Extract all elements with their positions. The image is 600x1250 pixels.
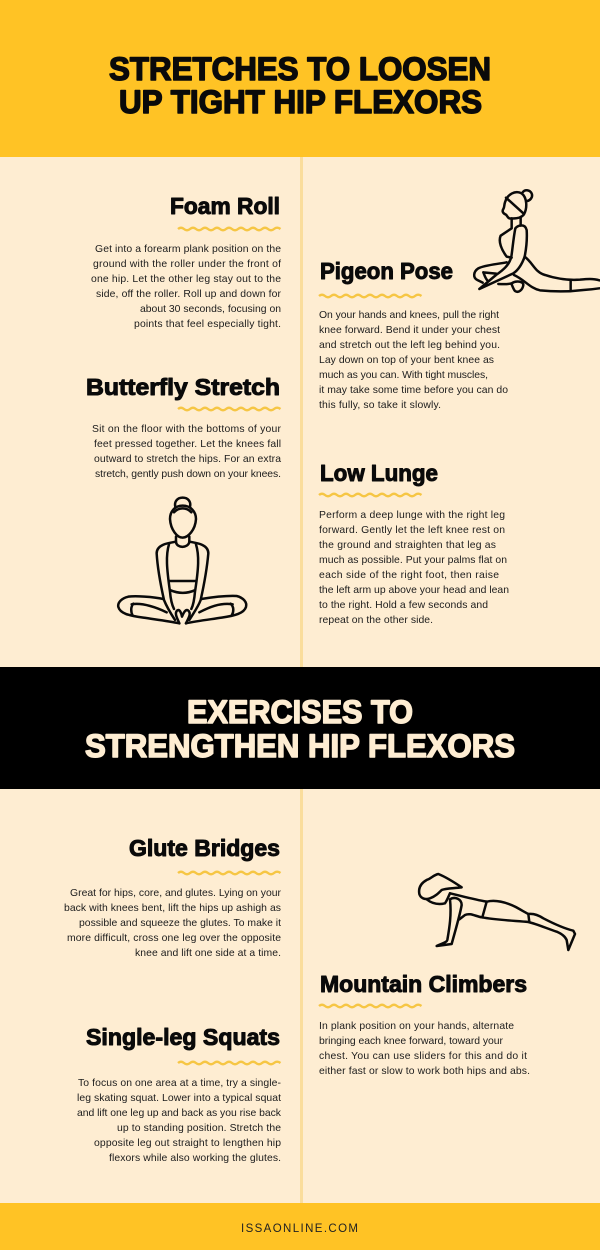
text: foam roll instructions: one hip. Let the other leg stay out to the bbox=[91, 274, 281, 285]
text: mountain climbers instructions: either fast or slow to work both hips and abs. bbox=[319, 1066, 530, 1077]
text: pigeon pose instructions: this fully, so take it slowly. bbox=[319, 400, 441, 411]
text: single-leg squats instructions: leg skating squat. Lower into a typical squat bbox=[77, 1093, 281, 1104]
heading: low lunge: Low Lunge bbox=[320, 460, 438, 486]
text: foam roll instructions: side, off the roller. Roll up and down for bbox=[96, 289, 282, 300]
text: foam roll instructions: ground with the roller under the front of bbox=[93, 259, 281, 270]
text: pigeon pose instructions: much as you can. With tight muscles, bbox=[319, 370, 488, 381]
text: mountain climbers instructions: bringing each knee forward, toward your bbox=[319, 1036, 504, 1047]
text: low lunge instructions: repeat on the other side. bbox=[319, 615, 433, 626]
text: glute bridges instructions: more difficult, cross one leg over the opposite bbox=[67, 933, 281, 944]
text: butterfly stretch instructions bbox=[92, 424, 282, 480]
text: low lunge instructions: much as possible. Put your palms flat on bbox=[319, 555, 507, 566]
text: foam roll instructions: Get into a forearm plank position on the bbox=[95, 244, 281, 255]
text: foam roll instructions bbox=[91, 244, 282, 330]
icon: plank figure bbox=[419, 874, 575, 950]
text: glute bridges instructions: possible and squeeze the glutes. To make it bbox=[79, 918, 281, 929]
text: glute bridges instructions: knee and lift one side at a time. bbox=[135, 948, 281, 959]
text: pigeon pose instructions: knee forward. Bend it under your chest bbox=[319, 325, 500, 336]
icon: pigeon pose figure bbox=[474, 190, 599, 292]
section heading bbox=[85, 694, 515, 764]
text: mountain climbers instructions bbox=[319, 1021, 530, 1077]
panel: single-leg squats bbox=[77, 1024, 282, 1164]
text: pigeon pose instructions: On your hands and knees, pull the right bbox=[319, 310, 499, 321]
text: foam roll instructions: about 30 seconds, focusing on bbox=[140, 304, 281, 315]
panel: foam roll bbox=[91, 193, 282, 330]
section heading: STRENGTHEN HIP FLEXORS bbox=[85, 728, 515, 764]
icon: butterfly pose figure bbox=[118, 498, 246, 623]
text: single-leg squats instructions: opposite leg out straight to lengthen hip bbox=[94, 1138, 281, 1149]
panel: pigeon pose bbox=[319, 258, 508, 411]
text: low lunge instructions: forward. Gently let the left knee rest on bbox=[319, 525, 505, 536]
text: glute bridges instructions: back with knees bent, lift the hips up ashigh as bbox=[64, 903, 281, 914]
text: foam roll instructions: points that feel especially tight. bbox=[134, 319, 281, 330]
text: low lunge instructions: to the right. Hold a few seconds and bbox=[319, 600, 488, 611]
footer url: ISSAONLINE.COM bbox=[241, 1223, 358, 1235]
text: low lunge instructions: each side of the right foot, then raise bbox=[319, 570, 499, 581]
title: UP TIGHT HIP FLEXORS bbox=[119, 84, 482, 120]
text: single-leg squats instructions bbox=[77, 1078, 282, 1164]
text: low lunge instructions: the left arm up above your head and lean bbox=[319, 585, 509, 596]
text: butterfly stretch instructions: outward to stretch the hips. For an extra bbox=[94, 454, 281, 465]
heading: foam roll: Foam Roll bbox=[170, 193, 280, 219]
panel: butterfly stretch bbox=[86, 374, 282, 480]
heading: mountain climbers: Mountain Climbers bbox=[320, 971, 527, 997]
title: STRETCHES TO LOOSEN bbox=[109, 51, 491, 87]
text: single-leg squats instructions: flexors while also working the glutes. bbox=[109, 1153, 281, 1164]
text: pigeon pose instructions: it may take some time before you can do bbox=[319, 385, 508, 396]
text: pigeon pose instructions: and stretch out the left leg behind you. bbox=[319, 340, 500, 351]
text: glute bridges instructions: Great for hips, core, and glutes. Lying on your bbox=[70, 888, 282, 899]
footer bbox=[0, 1203, 600, 1250]
text: pigeon pose instructions: Lay down on top of your bent knee as bbox=[319, 355, 494, 366]
text: low lunge instructions: the ground and straighten that leg as bbox=[319, 540, 496, 551]
text: single-leg squats instructions: and lift one leg up and back as you rise back bbox=[77, 1108, 282, 1119]
text: butterfly stretch instructions: stretch, gently push down on your knees. bbox=[95, 469, 281, 480]
heading: butterfly stretch: Butterfly Stretch bbox=[86, 374, 280, 400]
header band bbox=[0, 0, 600, 157]
panel: glute bridges bbox=[64, 835, 282, 959]
text: low lunge instructions: Perform a deep lunge with the right leg bbox=[319, 510, 505, 521]
text: butterfly stretch instructions: feet pressed together. Let the knees fall bbox=[94, 439, 281, 450]
heading: glute bridges: Glute Bridges bbox=[129, 835, 280, 861]
section heading: EXERCISES TO bbox=[187, 694, 413, 730]
text: glute bridges instructions bbox=[64, 888, 282, 959]
section band: strengthen bbox=[0, 667, 600, 789]
heading: single-leg squats: Single-leg Squats bbox=[86, 1024, 280, 1050]
text: mountain climbers instructions: chest. You can use sliders for this and do it bbox=[319, 1051, 527, 1062]
panel: low lunge bbox=[319, 460, 509, 626]
text: mountain climbers instructions: In plank position on your hands, alternate bbox=[319, 1021, 514, 1032]
title bbox=[109, 51, 491, 120]
heading: pigeon pose: Pigeon Pose bbox=[320, 258, 453, 284]
text: single-leg squats instructions: To focus on one area at a time, try a single- bbox=[78, 1078, 281, 1089]
text: single-leg squats instructions: up to standing position. Stretch the bbox=[117, 1123, 281, 1134]
panel: mountain climbers bbox=[319, 971, 530, 1077]
text: low lunge instructions bbox=[319, 510, 509, 626]
text: pigeon pose instructions bbox=[319, 310, 508, 411]
text: butterfly stretch instructions: Sit on the floor with the bottoms of your bbox=[92, 424, 282, 435]
